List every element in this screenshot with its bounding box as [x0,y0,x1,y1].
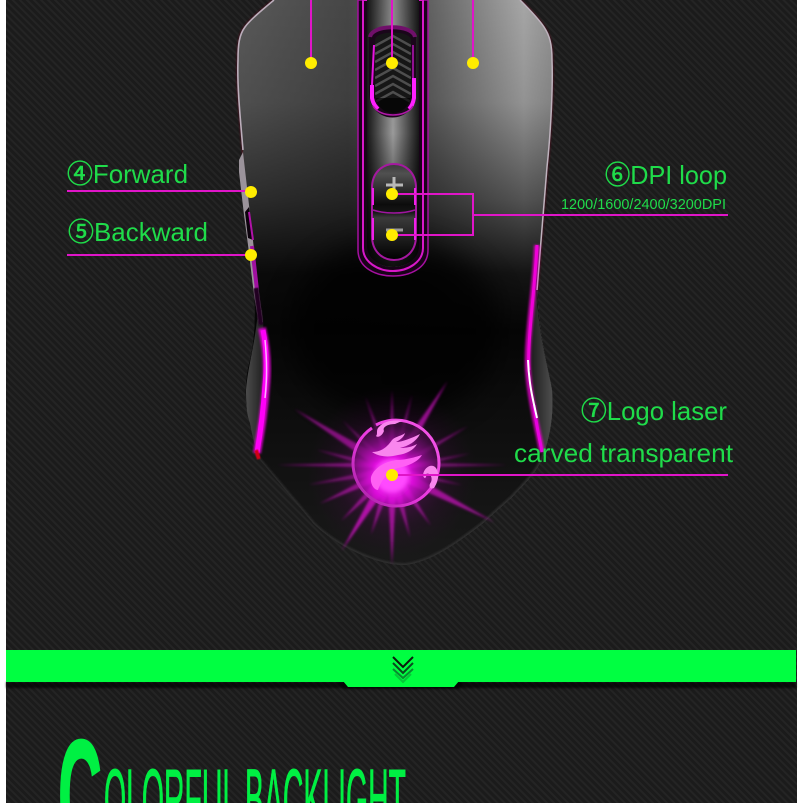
yellow marker dots [245,57,479,481]
section divider bar [6,650,796,689]
scroll wheel [369,26,416,120]
logo ring [353,420,439,506]
side buttons [239,152,263,325]
DPI buttons [372,164,416,260]
glowing logo disc [354,421,438,505]
heading: colorful backlight [58,730,406,803]
label: backward: ⑤Backward [68,217,208,247]
chevrons [393,657,413,682]
dragon emblem [371,421,438,490]
centre strip [358,0,428,276]
mouse body [236,0,556,570]
left light strip [256,328,267,459]
right light strip [528,245,542,452]
plus sign [386,177,403,192]
minus sign [386,228,403,232]
label: DPI loop: ⑥DPI loop [605,160,727,190]
connector lines [67,0,728,475]
label: forward: ④Forward [67,159,188,189]
label: logo laser: ⑦Logo laser [581,396,727,426]
logo with glow rays [277,378,507,565]
label: carved transparent: carved transparent [514,438,734,468]
label: DPI values: 1200/1600/2400/3200DPI [561,197,726,213]
